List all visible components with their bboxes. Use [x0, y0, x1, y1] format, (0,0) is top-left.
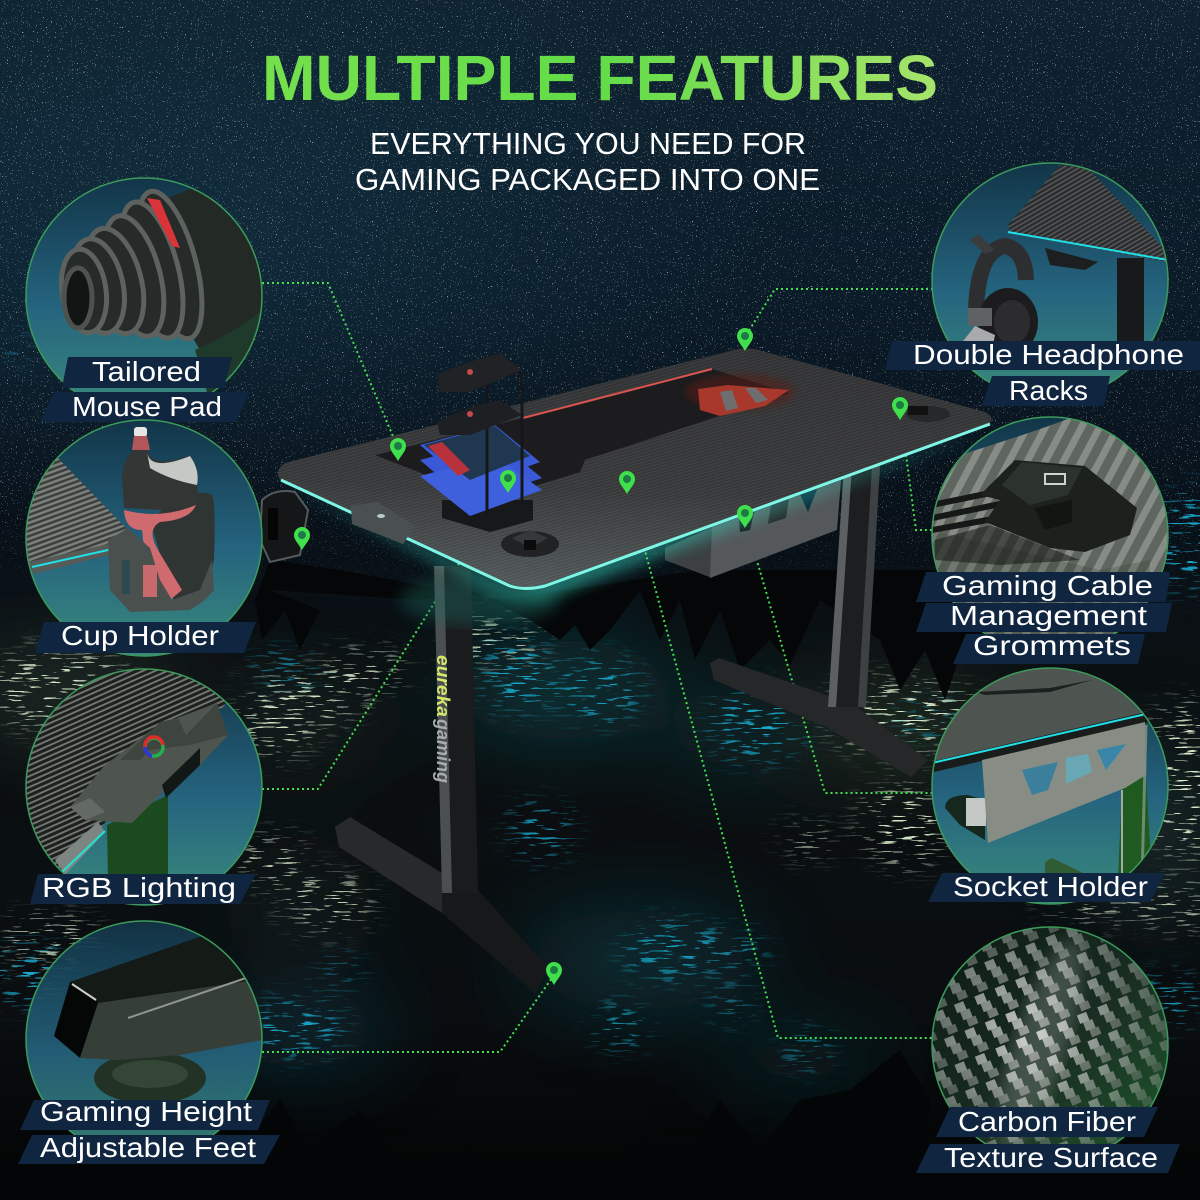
pin: mouse pad	[390, 438, 406, 461]
label: gaming height adjustable feet: Gaming Height	[40, 1096, 252, 1127]
cables	[932, 491, 1000, 533]
pin: rgb lighting	[500, 470, 516, 493]
foot pad	[94, 1055, 206, 1100]
pin: cable grommet	[892, 397, 908, 420]
pin: carbon fiber	[619, 471, 635, 494]
subtitle: EVERYTHING YOU NEED FOR	[370, 126, 806, 161]
plate	[982, 722, 1146, 843]
black silhouettes under the desk	[255, 560, 1000, 700]
leg	[1118, 776, 1150, 873]
brand text on leg: eureka	[433, 655, 453, 717]
mouse pad	[375, 369, 795, 500]
subtitle	[355, 126, 820, 197]
carbon top	[26, 670, 226, 870]
panel: rgb lighting	[20, 660, 262, 905]
panel: gaming cable management grommets	[931, 416, 1169, 634]
desk illustration	[260, 348, 992, 993]
label: tailored mouse pad: Tailored	[92, 356, 201, 387]
label: double headphone racks: Racks	[1009, 375, 1088, 406]
label: gaming height adjustable feet	[18, 1096, 280, 1164]
back leg	[710, 466, 928, 777]
label: gaming cable management grommets: Grommets	[973, 630, 1131, 661]
holder back lobe	[150, 493, 215, 605]
label: rgb lighting: RGB Lighting	[42, 872, 236, 903]
label: tailored mouse pad	[40, 356, 250, 422]
pin: adjustable feet	[546, 962, 562, 985]
cup holder on desk	[260, 491, 308, 562]
label: cup holder: Cup Holder	[61, 620, 219, 651]
title: MULTIPLE FEATURES	[262, 42, 938, 114]
rgb control box	[351, 502, 415, 544]
label: socket holder: Socket Holder	[953, 871, 1148, 902]
leader lines	[262, 283, 935, 1052]
cable grommet right	[906, 406, 950, 422]
subtitle: GAMING PACKAGED INTO ONE	[355, 162, 820, 197]
panel: adjustable feet	[26, 921, 262, 1157]
pad body	[168, 188, 262, 348]
brand text on leg	[433, 655, 453, 783]
rgb ring icon	[145, 737, 163, 756]
front leg and foot	[335, 566, 547, 993]
bar	[70, 936, 246, 1007]
panel: cup holder	[20, 420, 262, 656]
desk rgb edge	[281, 424, 990, 588]
desk corner	[1008, 165, 1170, 262]
label: carbon fiber texture surface: Carbon Fiber	[958, 1106, 1136, 1137]
pin: headphone racks	[737, 328, 753, 351]
panel: double headphone racks	[932, 163, 1170, 399]
control box	[70, 703, 228, 823]
rack	[1045, 248, 1098, 270]
carbon surface	[932, 419, 1168, 634]
pin: socket holder	[737, 505, 753, 528]
label: gaming cable management grommets: Management	[950, 600, 1147, 631]
label: gaming cable management grommets: Gaming Cable	[942, 570, 1153, 601]
panel: carbon fiber texture surface	[930, 925, 1170, 1165]
label: gaming height adjustable feet: Adjustable Feet	[40, 1132, 256, 1163]
label: carbon fiber texture surface	[916, 1106, 1180, 1173]
panel: socket holder	[920, 668, 1170, 904]
label: gaming cable management grommets	[916, 570, 1172, 664]
panel: tailored mouse pad	[25, 177, 263, 392]
leg	[107, 795, 168, 880]
glow under desk	[280, 425, 992, 600]
desk surface	[936, 668, 1142, 761]
hub	[980, 460, 1137, 552]
label: double headphone racks: Double Headphone	[913, 339, 1184, 370]
label: double headphone racks	[885, 339, 1200, 406]
label: carbon fiber texture surface: Texture Surface	[944, 1142, 1158, 1173]
leg	[1117, 258, 1144, 348]
desk top	[278, 348, 992, 587]
pin: cup holder	[294, 527, 310, 550]
headphones	[976, 246, 1026, 310]
cable grommet front	[501, 530, 559, 557]
brand text on leg: gaming	[433, 718, 453, 783]
game stand	[420, 354, 542, 532]
socket holder	[665, 480, 841, 578]
bottle	[122, 450, 198, 510]
label: tailored mouse pad: Mouse Pad	[72, 391, 222, 422]
holder cage	[108, 528, 214, 612]
edge	[55, 822, 105, 875]
desk corner	[26, 458, 127, 562]
socket behind	[945, 795, 985, 840]
label: cup holder	[35, 620, 256, 653]
